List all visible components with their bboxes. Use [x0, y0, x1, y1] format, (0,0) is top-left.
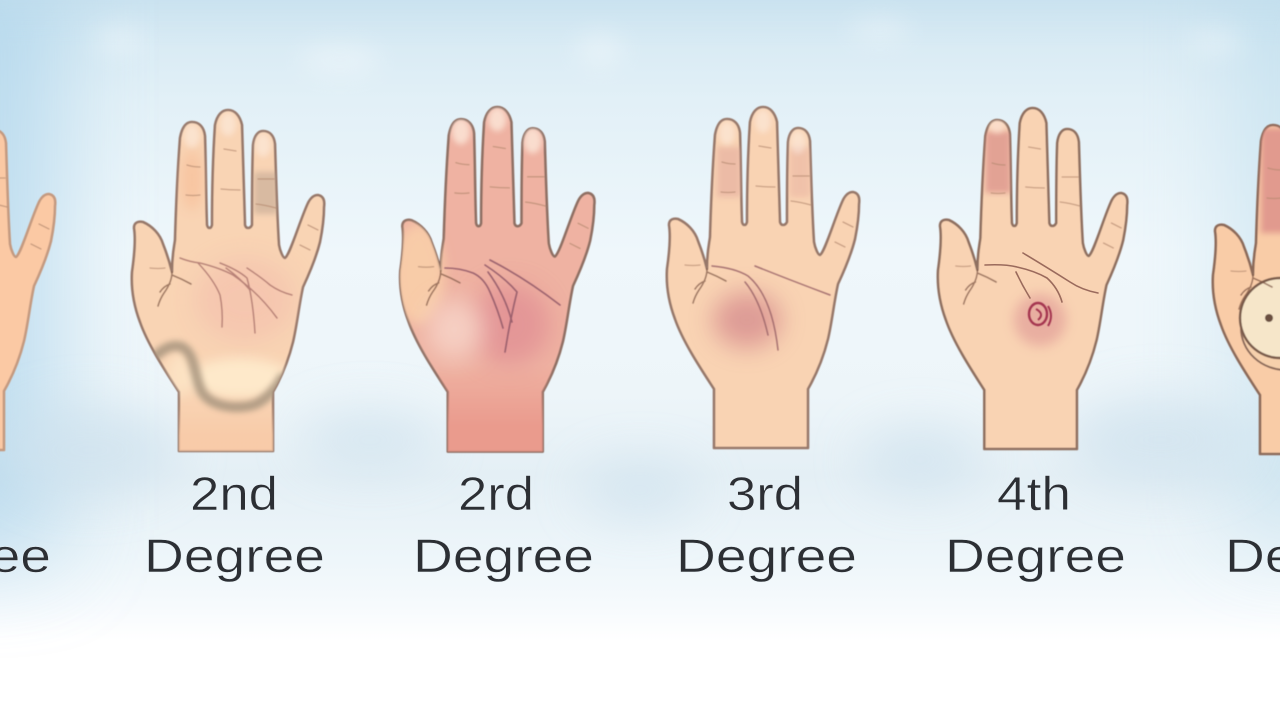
hand: 4th degree (ulcer)	[938, 108, 1127, 449]
wound: 4th degree	[985, 253, 1098, 346]
label: 2nd degree: Degree	[144, 529, 325, 582]
label: 2nd degree	[144, 467, 325, 582]
label: 3rd degree: 3rd	[727, 467, 803, 520]
palm lines: 2rd degree	[445, 260, 560, 352]
hand: 3rd degree (bruise)	[667, 107, 859, 448]
label: 2rd degree: 2rd	[458, 467, 534, 520]
hand: 2nd degree	[132, 110, 324, 455]
palm lines: 3rd degree	[712, 266, 830, 350]
label: 3rd degree	[676, 467, 857, 582]
hand: 5th degree (cropped right)	[1213, 113, 1280, 454]
label: 4th degree: 4th	[997, 467, 1071, 520]
label: 4th degree	[945, 467, 1126, 582]
hand: 2rd degree (red swollen)	[392, 107, 594, 461]
label: 2rd degree	[413, 467, 594, 582]
label: 3rd degree: Degree	[676, 529, 857, 582]
label: 2rd degree: Degree	[413, 529, 594, 582]
hand: 1st degree (cropped left)	[0, 109, 55, 450]
label: 2nd degree: 2nd	[190, 467, 278, 520]
label: 4th degree: Degree	[945, 529, 1126, 582]
blister band	[150, 346, 282, 407]
